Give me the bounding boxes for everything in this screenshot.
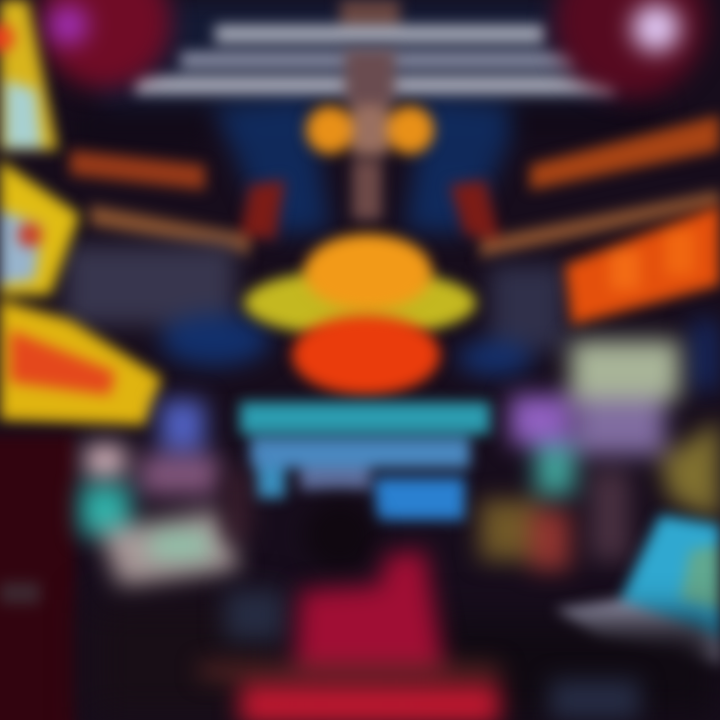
panel: left dark column [0, 435, 75, 720]
panel: left yellow sign [0, 0, 162, 425]
panel: mid right wall [457, 265, 720, 390]
panel: top light stripes [135, 0, 615, 94]
icon: top left red disc [39, 0, 171, 88]
panel: right orange rails [450, 115, 720, 258]
icon: central figure [306, 50, 434, 220]
panel: bottom floor [90, 600, 720, 720]
panel: left machines [80, 400, 240, 590]
panel: bottom central figure [225, 470, 376, 640]
panel: right bright screen [555, 515, 720, 665]
panel: left orange rails [70, 150, 285, 255]
icon: central planet sign [244, 234, 476, 395]
panel: right machines [480, 340, 720, 570]
planet top [304, 234, 432, 310]
panel: mid left wall [65, 245, 270, 366]
icon: top right red disc [554, 0, 706, 98]
panel: central teal screens [240, 402, 490, 520]
panel: bottom red carpet [200, 550, 640, 720]
planet bottom [292, 315, 440, 395]
planet ring [244, 269, 476, 337]
panel: ceiling [0, 0, 720, 235]
panel: right orange sign [565, 205, 720, 325]
